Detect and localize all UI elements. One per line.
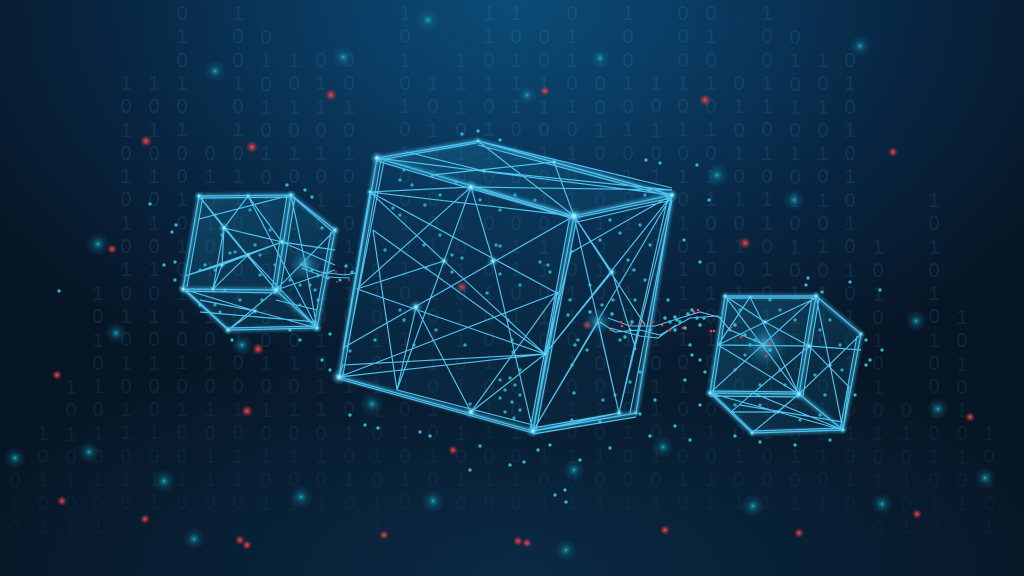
binary digit columns background: 1001010110101010010110 (232, 3, 244, 514)
binary digit columns background: 1010101001010110101 (650, 73, 662, 514)
binary digit columns background: 1010101001010110101010 (399, 3, 411, 514)
right cube nodes (705, 291, 865, 437)
binary digit columns background: 010101010101001010101 (260, 27, 272, 515)
large cube faces (377, 141, 672, 216)
binary digit columns background: 101010101 (956, 307, 968, 515)
connector: centre cube to right cube (590, 310, 770, 356)
right cube glow lines (710, 296, 861, 433)
small cube faces (183, 195, 335, 330)
binary digit columns background: 1010101 (65, 377, 77, 539)
binary digit columns background: 10101 (983, 423, 995, 538)
binary digit columns background: 001101010110101010101 (538, 27, 550, 515)
right cube (705, 291, 865, 437)
binary digit columns background: 0101010101101010101 (733, 73, 745, 514)
binary digit columns background: 0101010110101010101011 (705, 3, 717, 514)
binary digit columns background: 10101010010101010101 (288, 50, 300, 515)
right cube connector glow (743, 323, 787, 367)
binary digit columns background: 0101010010101101010010 (176, 3, 188, 514)
binary digit columns background: 10010101010110010101 (594, 50, 606, 515)
binary digit columns background: 10101 (37, 423, 49, 538)
right cube faces (710, 296, 861, 433)
binary digit columns background: 010101 (900, 400, 912, 538)
binary digit columns background: 1010100101011010101 (427, 73, 439, 514)
small cube nodes (178, 190, 340, 335)
binary digit columns background: 1010101010110 (872, 237, 884, 539)
red glowing dots (52, 86, 975, 550)
binary digit columns background: 0101010101010110 (204, 143, 216, 514)
binary digit columns background: 010 (9, 470, 21, 539)
binary digit columns background: 00101010101001101010 (343, 50, 355, 515)
scattered cyan particles (59, 131, 882, 502)
binary digit columns background: 0001010101011010101010 (677, 3, 689, 514)
binary digit columns background: 1011101010110101001010 (510, 3, 522, 514)
large cube wire lines (339, 141, 672, 434)
binary digit columns background: 010101101011 (371, 260, 383, 538)
binary digit columns background: 01101010101010110101 (315, 50, 327, 515)
large cube nodes (331, 137, 678, 438)
large cube glow lines (339, 141, 672, 431)
small cube glow lines (183, 195, 335, 330)
binary digit columns background: 010101010101101010101 (789, 27, 801, 515)
small cube wire lines (183, 195, 335, 331)
binary digit columns background: 1001101011010101011001 (761, 3, 773, 514)
binary digit columns background: 101010100101010 (928, 190, 940, 538)
small cube connector glow (290, 249, 320, 279)
large centre cube (331, 137, 678, 438)
small left cube (178, 190, 340, 335)
large cube connector glow (585, 309, 611, 335)
binary digit columns background: 0110101010101101010101 (566, 3, 578, 514)
binary digit columns background: 11101001010110101010 (455, 50, 467, 515)
binary digit columns background: 10101010101 (92, 283, 104, 538)
binary digit columns background: 1010101010101011010 (120, 73, 132, 514)
binary digit columns background: 1001010101101010101001 (622, 3, 634, 514)
binary digit columns background: 1010101010101001011 (148, 73, 160, 514)
connector: left cube to centre cube (300, 264, 356, 282)
right cube wire lines (710, 296, 861, 433)
binary digit columns background: 10101010101101010101 (817, 50, 829, 515)
binary digit columns background: 1101011010101001011010 (483, 3, 495, 514)
binary digit columns background: 01010101010101101010 (844, 50, 856, 515)
